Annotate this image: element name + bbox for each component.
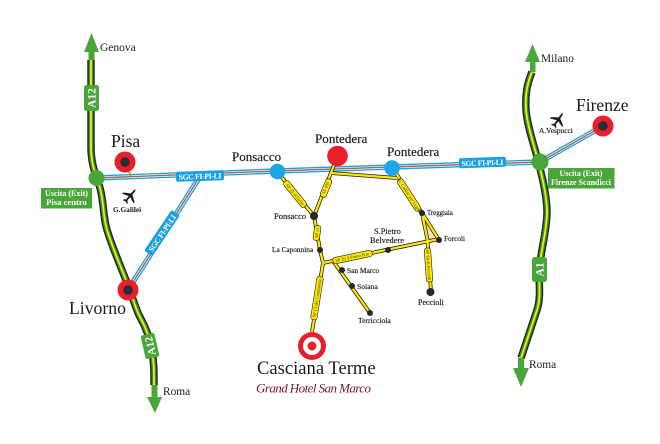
road: SGC FI-PI-LI [96,126,603,290]
label: A1: A1 [534,262,546,277]
place labels: Peccioli [418,298,445,307]
place labels: Roma [163,386,190,398]
yellow road label text: SS 439 [321,180,331,195]
exit label: Pisa centro [41,188,92,208]
city marker: Pontedera [327,146,348,166]
exit label: Pisa centro: Pisa centro [46,197,87,207]
city marker: Livorno [118,280,138,300]
place labels: Genova [100,42,136,54]
place labels: Treggiaia [427,210,453,217]
place labels: Ponsacco [232,149,281,164]
label: A12 north: A12 [86,88,98,108]
place labels [69,42,629,398]
yellow road label text: SP 23 di Gello [285,183,306,207]
place labels: Firenze [576,95,629,115]
label: SGC west: SGC FI-PI-LI [178,171,222,182]
place labels: Forcoli [444,234,465,243]
junction: Ponsacco [270,164,285,179]
yellow road label text: SP 13 [314,227,320,238]
yellow road label text: SP 26 S.Pietro B.te [335,251,370,263]
label: SGC east: SGC FI-PI-LI [461,158,504,168]
yellow road label text [285,177,432,318]
arrow: Milano [525,44,540,72]
place labels: G.Galilei [113,205,141,214]
label: A12 north [84,85,99,111]
place labels: S.Pietro [374,227,401,236]
road: A12 motorway [91,60,154,385]
city marker: Pisa [114,152,136,172]
place labels: La Caponnina [272,245,314,254]
place labels: Ponsacco [274,211,306,221]
icon: plane Firenze [547,109,569,131]
arrow: Roma (A12) [147,385,162,413]
junction: Firenze exit [532,154,548,170]
label: A1 [532,257,547,282]
place labels: Roma [529,359,556,371]
destination target: Casciana Terme [298,332,326,360]
exit label: Firenze Scandicci: Uscita (Exit) [560,169,603,178]
place labels: Pisa [111,131,140,151]
city marker: Firenze [592,116,614,136]
place labels: Pontedera [315,131,368,146]
town nodes [310,210,442,316]
arrow: Roma (A1) [513,358,529,387]
exit label: Firenze Scandicci: Firenze Scandicci [551,178,612,187]
place labels: Soiana [357,282,379,291]
place labels: Belvedere [370,236,404,245]
local yellow roads [279,160,439,332]
place labels: Milano [541,53,574,65]
exit label: Firenze Scandicci [548,168,614,188]
arrow: Genova [84,33,99,60]
icon: plane Pisa [119,185,141,207]
place labels: Livorno [69,298,126,318]
place labels: Terricciola [358,316,391,325]
place labels: A.Vespucci [539,126,573,135]
yellow road label text: SC Colline per Legoli [396,177,423,214]
junction: Pontedera [384,160,400,176]
place labels: Casciana Terme [257,358,376,379]
yellow road labels [282,178,433,320]
hotel name: Grand Hotel San Marco [256,380,372,396]
junction: Pisa exit [88,170,104,186]
label: A12 south [140,333,160,359]
exit label: Pisa centro: Uscita (Exit) [45,189,88,198]
label: A12 south: A12 [143,335,159,356]
label: SGC branch: SGC FI-PI-LI [147,213,178,254]
yellow road label text: SP 64 di Peccioli [425,249,432,281]
road stub: Pisa link [128,170,131,176]
place labels: Pontedera [387,144,440,159]
place labels: San Marco [347,266,380,275]
yellow road label text: SP 13 del Commercio [311,277,323,318]
road: A1 motorway [521,72,547,358]
